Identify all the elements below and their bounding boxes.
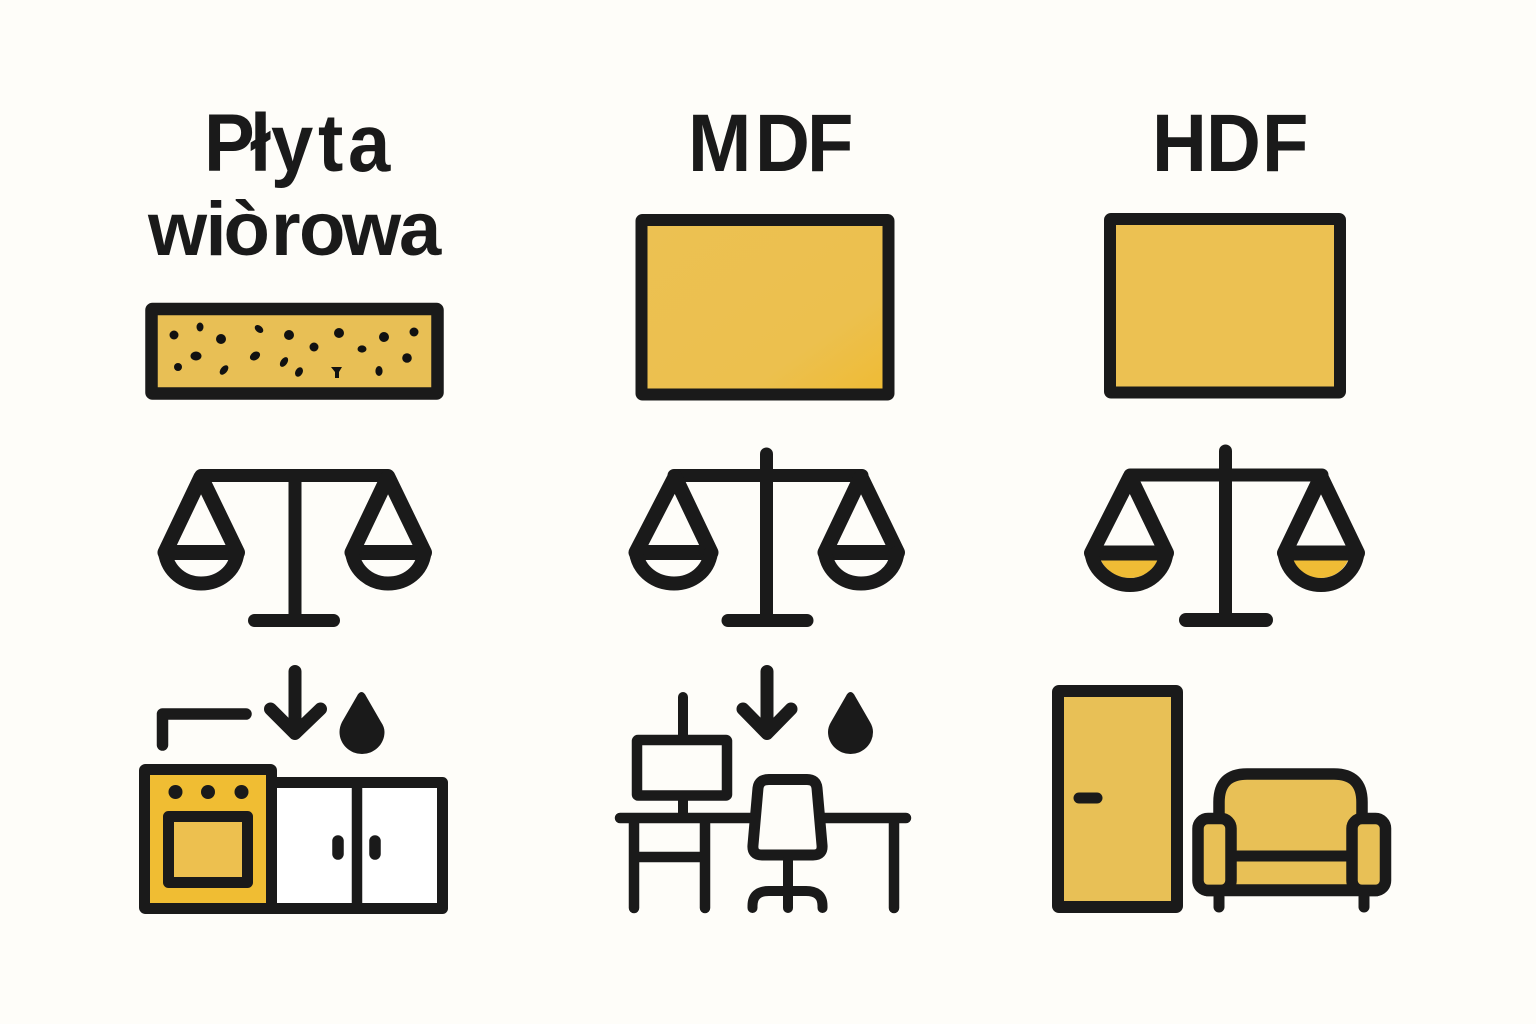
column: particle board (144, 98, 442, 908)
icon: MDF board (642, 220, 888, 394)
heading: HDF: HDF (1152, 98, 1308, 189)
icon: down arrow (270, 672, 320, 734)
heading: Płyta wiòrowa: wiòrowa (147, 187, 442, 272)
heading: Płyta wiòrowa (147, 98, 442, 272)
icon: desk with monitor and chair, moisture warning (620, 672, 906, 908)
icon: HDF board (1110, 219, 1340, 392)
icon: balance scale, medium (636, 454, 898, 620)
icon: monitor (637, 697, 727, 817)
icon: cabinet doors (271, 782, 442, 908)
icon: down arrow (743, 672, 791, 734)
icon: balance scale, light (165, 476, 424, 620)
heading: MDF: MDF (688, 98, 853, 189)
heading: Płyta wiòrowa: Płyta (204, 98, 391, 189)
icon: oven (144, 770, 272, 908)
icon: office chair (752, 780, 822, 908)
icon: water drop (828, 692, 873, 754)
column: HDF (1058, 98, 1386, 907)
icon: particle board cross-section (152, 309, 438, 394)
icon: kitchen cabinets with oven, moisture warning (144, 672, 442, 908)
column: MDF (620, 98, 906, 908)
icon: range hood bracket (162, 714, 246, 745)
icon: balance scale, heavy (1092, 451, 1358, 620)
icon: armchair (1198, 774, 1386, 907)
icon: desk (620, 818, 906, 908)
icon: water drop (340, 692, 384, 754)
icon: door (1058, 691, 1177, 907)
